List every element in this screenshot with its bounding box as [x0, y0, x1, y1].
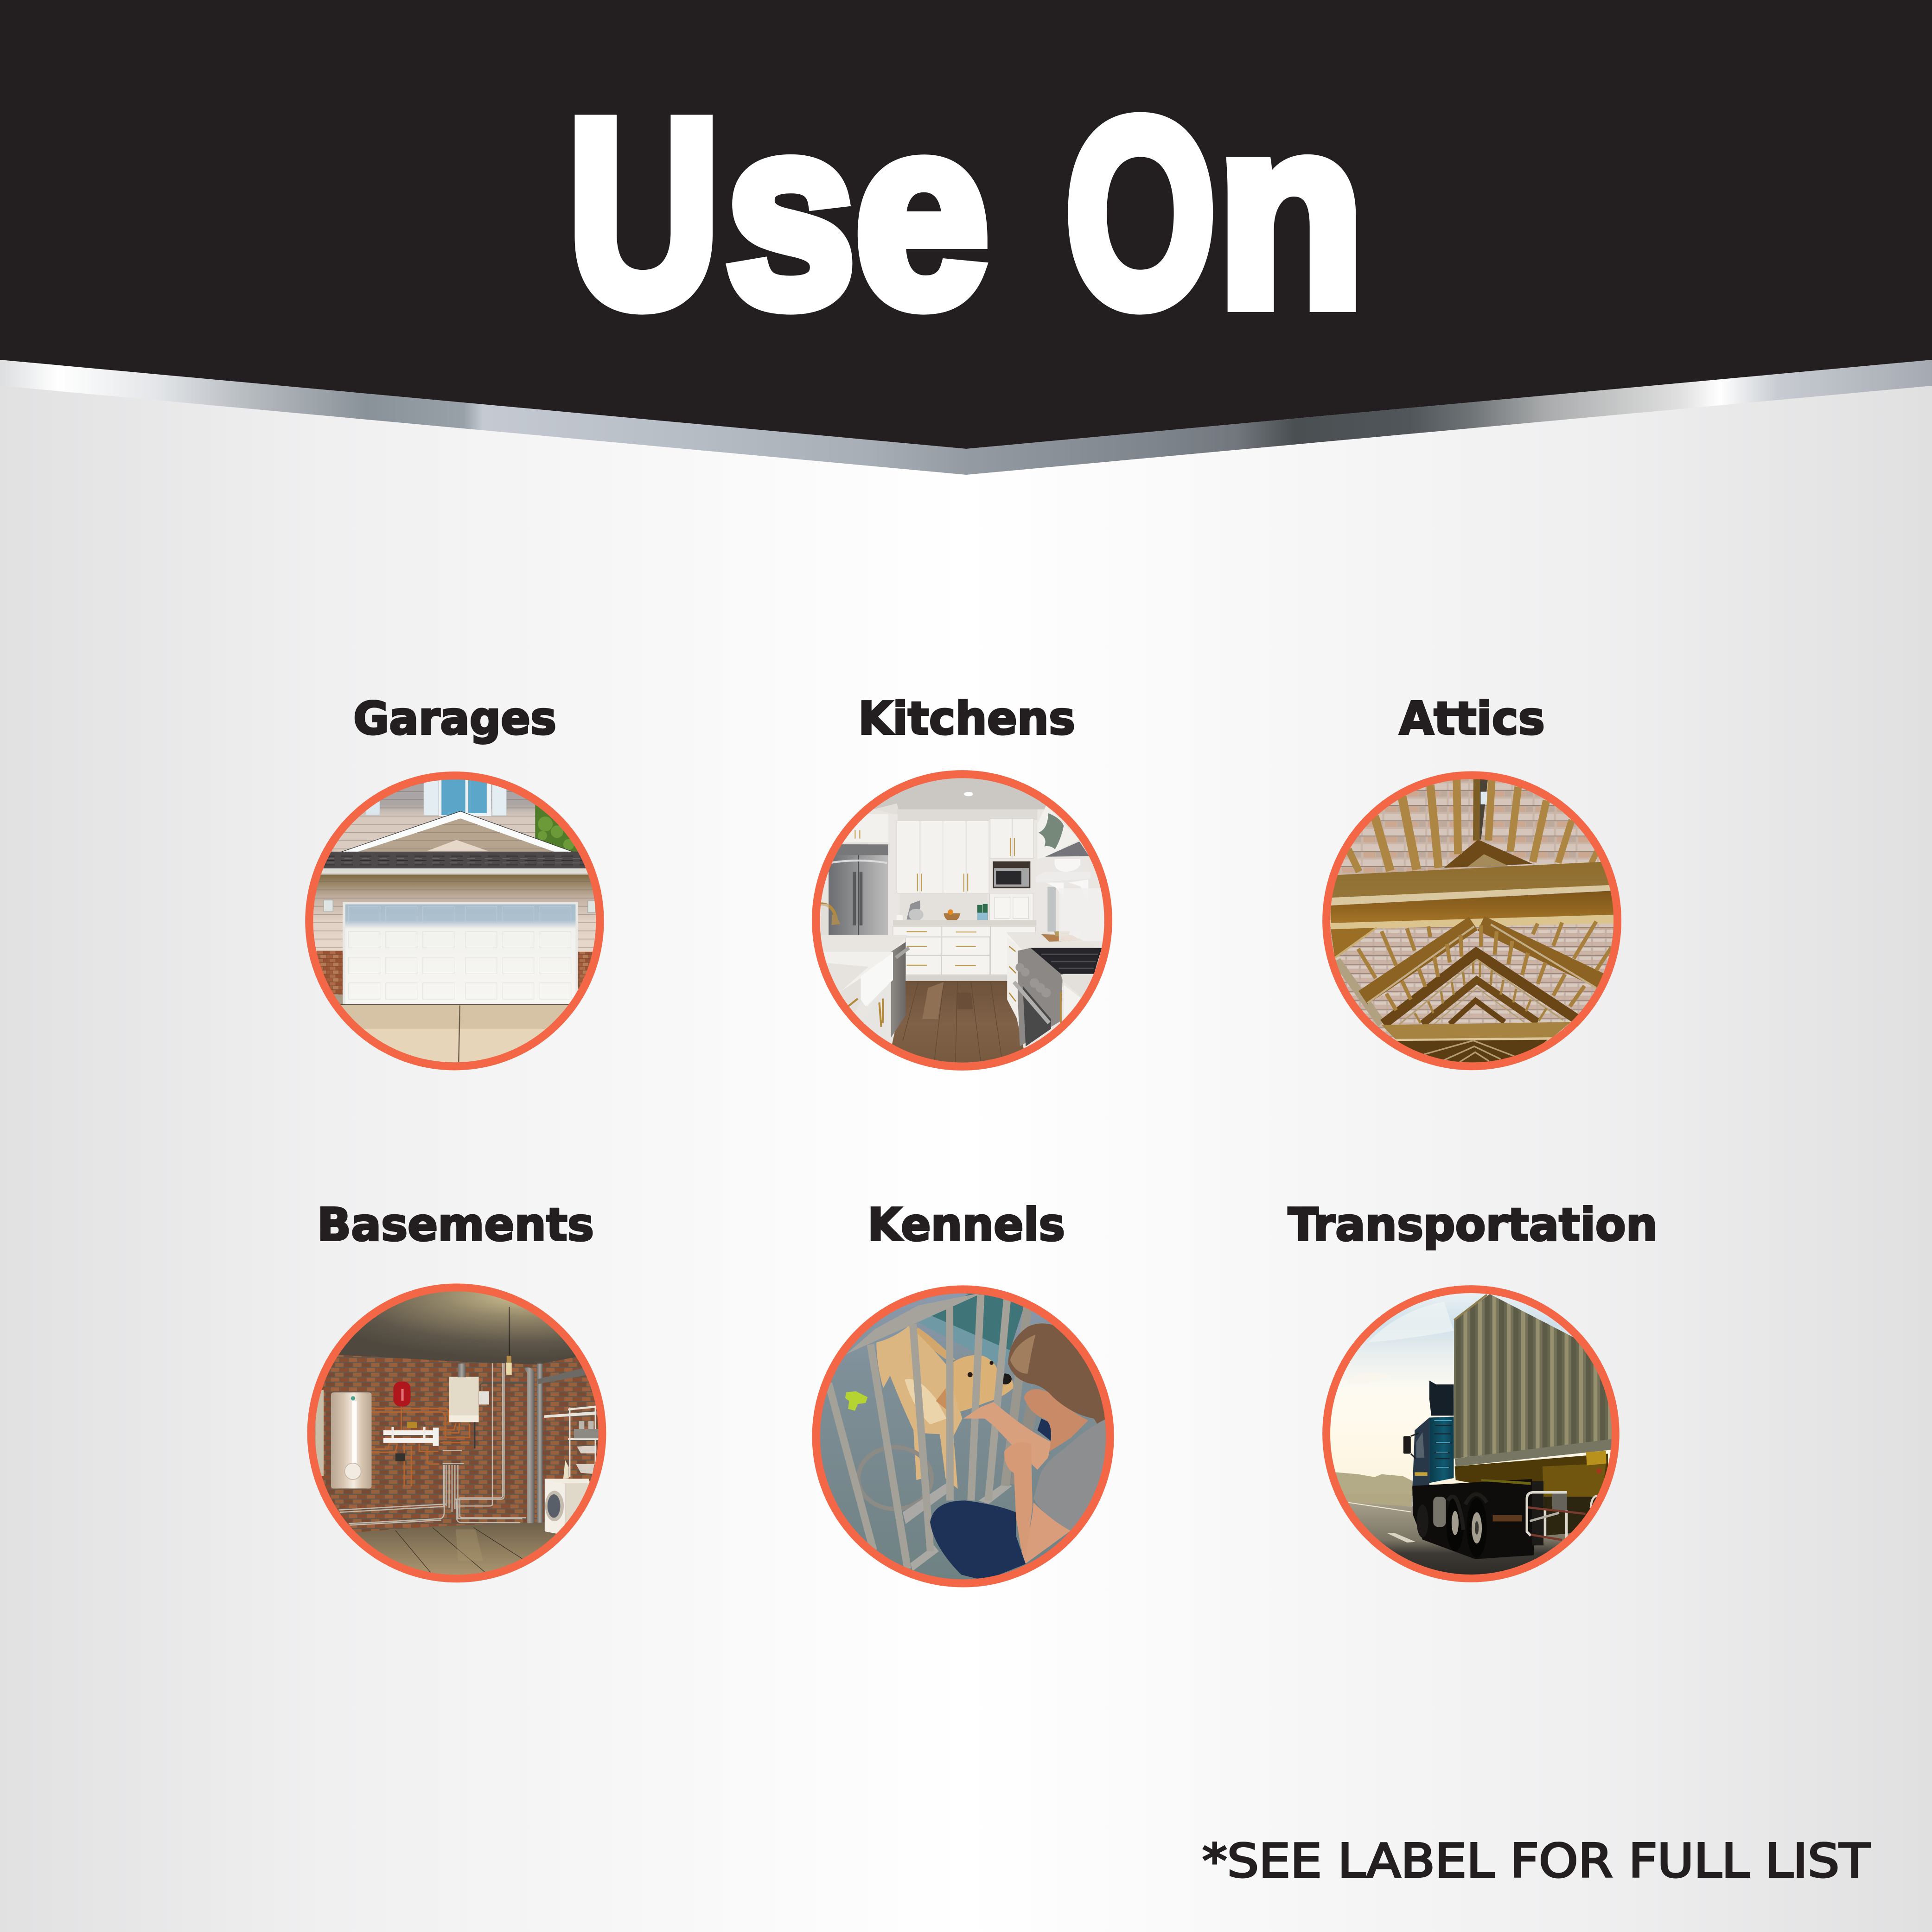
title: U [568, 65, 720, 361]
ring [1326, 775, 1618, 1066]
header panel [0, 0, 1932, 449]
title: e [855, 65, 989, 361]
label: basements: Basements [317, 1199, 594, 1251]
label: transportation: Transportation [1288, 1199, 1658, 1251]
ring [1326, 1289, 1615, 1578]
label: garages: Garages [353, 692, 556, 745]
photo: woman and dog in kennel [809, 1282, 1115, 1588]
photo: attic rafters [1319, 767, 1625, 1073]
title: n [1218, 65, 1364, 361]
photo: garage door [301, 767, 607, 1073]
photo: basement utility room [304, 1280, 610, 1586]
panel: basements [304, 1199, 610, 1586]
panel: transportation [1288, 1199, 1658, 1588]
panel: kennels [809, 1199, 1115, 1588]
metallic chevron band [0, 360, 1932, 475]
footnote: *SEE LABEL FOR FULL LIST [1202, 1834, 1870, 1888]
panel: garages [301, 692, 607, 1073]
title: O [1065, 65, 1216, 361]
ring [311, 1288, 602, 1579]
label: attics: Attics [1399, 692, 1545, 745]
photo: kitchen [809, 767, 1115, 1073]
ring [309, 776, 600, 1066]
title: s [726, 65, 855, 361]
panel: attics [1319, 692, 1625, 1073]
label: kennels: Kennels [867, 1199, 1065, 1251]
ring [816, 774, 1108, 1066]
label: kitchens: Kitchens [858, 692, 1075, 745]
photo: container truck [1319, 1282, 1625, 1588]
ring [816, 1289, 1110, 1583]
panel: kitchens [809, 692, 1115, 1073]
